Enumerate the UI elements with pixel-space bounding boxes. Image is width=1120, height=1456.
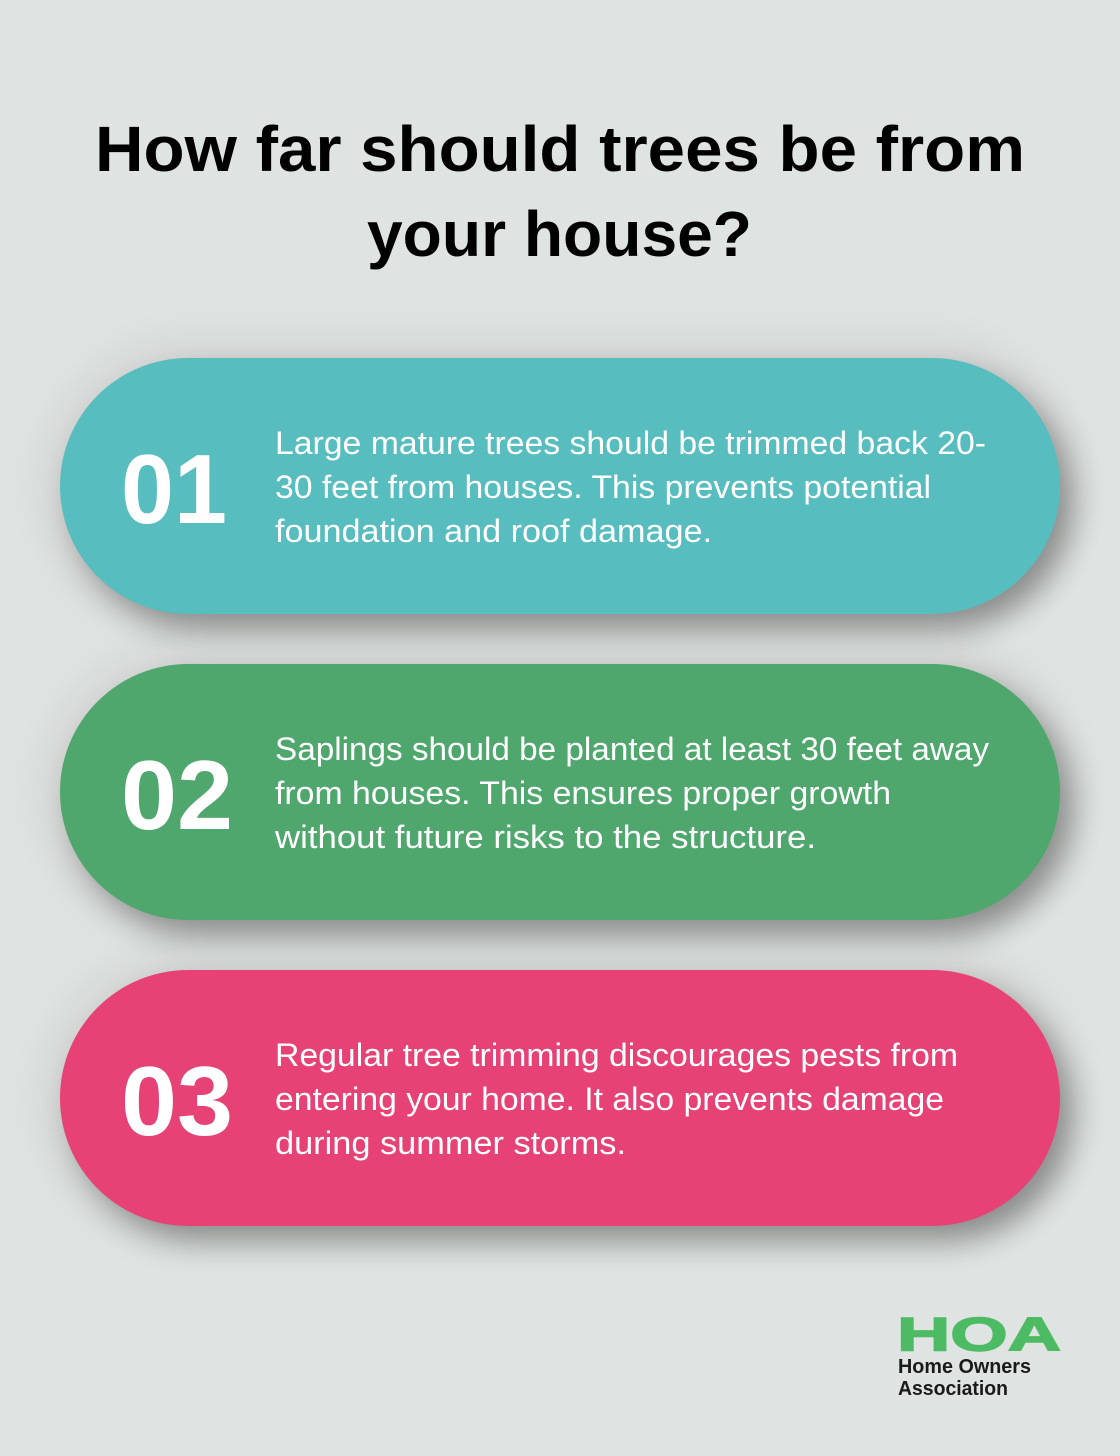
text: step 03 xyxy=(275,1037,958,1161)
text: step 01: 30 feet from houses. This prevents potential xyxy=(275,469,931,505)
text: step 02: without future risks to the structure. xyxy=(274,819,816,855)
number 01: 01 xyxy=(121,434,227,544)
text: step 03: during summer storms. xyxy=(275,1125,626,1161)
text: step 01: foundation and roof damage. xyxy=(275,513,712,549)
number 03: 03 xyxy=(121,1046,233,1156)
text: step 03: entering your home. It also prevents damage xyxy=(275,1081,944,1117)
logo: HOA Home Owners Association: HOA xyxy=(897,1308,1061,1360)
text: step 02: from houses. This ensures proper growth xyxy=(275,775,891,811)
text: step 01 xyxy=(275,425,986,549)
text: step 01: Large mature trees should be trimmed back 20- xyxy=(275,425,986,461)
panel: step 03 xyxy=(30,940,1090,1256)
title xyxy=(95,113,1025,270)
logo: HOA Home Owners Association xyxy=(897,1308,1061,1400)
text: step 02 xyxy=(274,731,989,855)
number 02: 02 xyxy=(121,740,233,850)
panel: step 02 xyxy=(30,634,1090,950)
title: your house? xyxy=(367,198,752,270)
logo: HOA Home Owners Association: Association xyxy=(898,1378,1008,1400)
text: step 03: Regular tree trimming discourages pests from xyxy=(275,1037,958,1073)
panel: step 01 xyxy=(30,328,1090,644)
text: step 02: Saplings should be planted at least 30 feet away xyxy=(275,731,989,767)
title: How far should trees be from xyxy=(95,113,1025,185)
logo: HOA Home Owners Association: Home Owners xyxy=(898,1356,1031,1378)
